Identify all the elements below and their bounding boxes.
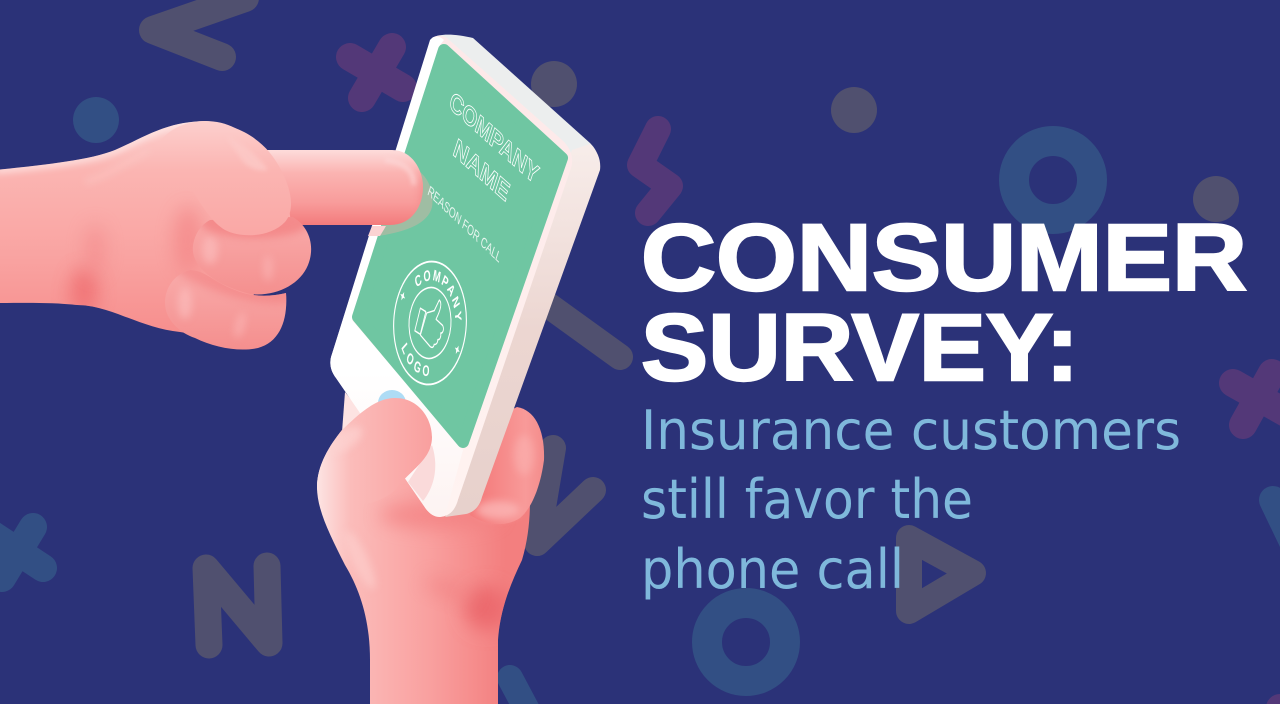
subtitle [641,399,1181,601]
title: CONSUMER [641,205,1247,311]
shape: grey dot right [1193,176,1239,222]
shape: grey dot by phone [531,61,577,107]
shape: blue ring bottom [707,603,785,681]
shape: blue cross left [0,527,43,578]
shape: blue ring top [1014,141,1092,219]
subtitle: still favor the [641,468,973,531]
phone side [445,144,600,517]
company logo badge [393,260,467,386]
phone front face [330,37,463,517]
company name: COMPANY [446,86,542,191]
title [641,205,1247,401]
holding hand palm [317,430,530,704]
shape: grey letter N [206,566,269,645]
upper curled finger [193,217,312,294]
shape: blue dot [73,97,119,143]
phone top edge [432,35,598,162]
shape: grey dot top [831,87,877,133]
badge text: COMPANY [415,270,462,320]
pointing hand arm [0,121,290,333]
reason for call: REASON FOR CALL [426,183,503,266]
thumbs up icon [413,289,450,352]
badge stars [398,290,462,356]
pointing finger [268,150,423,225]
badge text: LOGO [402,342,430,376]
subtitle: Insurance customers [641,399,1181,462]
shape: purple cross right [1233,373,1280,425]
subtitle: phone call [641,538,904,601]
phone [330,34,600,517]
thumb shadow on phone [408,445,435,501]
shape: purple corner mark [1272,700,1280,704]
shape: grey chevron [153,0,245,57]
phone front rim [330,36,572,517]
badge text [402,270,462,376]
shape: purple cross top [350,47,403,98]
shape: grey diagonal line [530,292,620,357]
shape: blue stroke right edge [1273,500,1280,548]
holding hand back fingers [342,392,544,524]
finger press halo [378,172,432,236]
shape: purple zigzag [640,129,670,213]
shape: grey check [537,448,593,543]
home button [378,390,406,416]
lower curled finger [165,272,286,350]
shape: grey play triangle [909,538,973,611]
hand thumb on top [150,121,291,235]
phone screen [358,50,562,442]
company name: NAME [450,133,513,208]
shape: blue stroke bottom [510,678,535,704]
halo on phone rim [368,226,386,236]
holding hand thumb [317,398,432,491]
title: SURVEY: [641,295,1079,401]
